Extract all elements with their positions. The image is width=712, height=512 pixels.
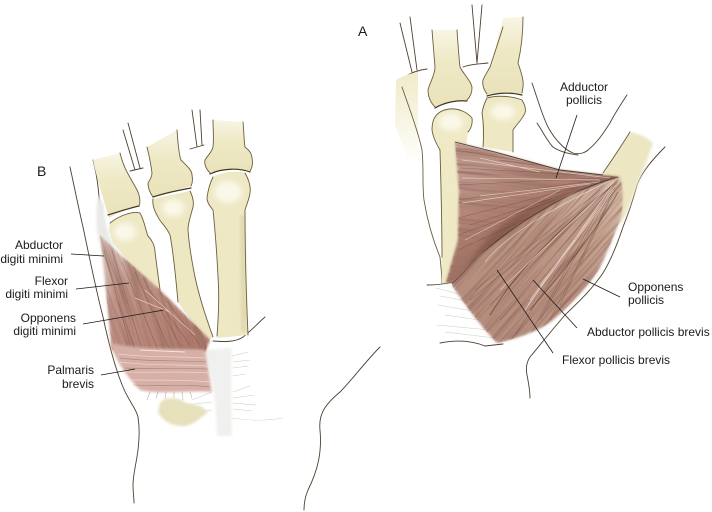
- wrist line lower right: [232, 418, 283, 420]
- bone: thumb metacarpal: [603, 132, 653, 225]
- panel label: B: B: [37, 163, 46, 179]
- tendon sheet: white central band: [96, 195, 256, 436]
- label: Flexor digiti minimi: digiti minimi: [5, 287, 68, 301]
- muscle: abductor, flexor and opponens digiti minimi: [100, 235, 212, 352]
- bone outline: ring finger: [402, 87, 442, 283]
- bone: middle finger phalanx: [205, 120, 252, 174]
- bone: ring finger phalanx: [147, 130, 192, 197]
- label: Opponens digiti minimi: [13, 310, 164, 338]
- label: Opponens digiti minimi: digiti minimi: [13, 324, 76, 338]
- label: Palmaris brevis: Palmaris: [47, 363, 94, 377]
- label: Abductor pollicis brevis: Abductor pollicis brevis: [587, 325, 710, 339]
- label: Opponens pollicis: pollicis: [628, 293, 664, 307]
- label: Flexor pollicis brevis: [497, 270, 670, 367]
- bone: little finger phalanx: [93, 153, 140, 218]
- muscle: palmaris brevis: [110, 343, 212, 400]
- label: Opponens pollicis: [583, 279, 683, 307]
- label: Opponens digiti minimi: Opponens: [21, 311, 76, 325]
- label: Flexor digiti minimi: Flexor: [35, 274, 68, 288]
- inner skin edge beside little finger: [93, 160, 100, 222]
- skin outlines of hand A: [304, 83, 665, 510]
- bone: thumb-side finger metacarpal: [482, 96, 525, 152]
- panel: view A, thumb side of the hand: [304, 4, 666, 510]
- muscle: thenar group (flexor, abductor and opponens pollicis brevis): [451, 176, 624, 344]
- label: Opponens pollicis: Opponens: [628, 280, 683, 294]
- wrist edge at right of hand B: [213, 317, 265, 342]
- label: Abductor digiti minimi: digiti minimi: [0, 252, 63, 266]
- tendon sheet: white palmar fascia: [427, 279, 503, 346]
- tendon ticks between fingers: [123, 110, 204, 171]
- bone: index finger phalanx: [428, 30, 472, 108]
- bone: little finger metacarpal: [109, 212, 161, 292]
- bone: middle finger metacarpal: [207, 172, 250, 338]
- label: Flexor pollicis brevis: Flexor pollicis brevis: [562, 353, 670, 367]
- label: Abductor digiti minimi: Abductor: [15, 238, 63, 252]
- panel label: A: A: [358, 23, 368, 39]
- label: Adductor pollicis: Adductor: [560, 80, 608, 94]
- bone: index finger metacarpal: [432, 109, 472, 284]
- skin outline of hand B: [70, 167, 139, 503]
- bone: ring finger metacarpal: [153, 191, 213, 340]
- panel: view B, little finger side of the hand: [70, 110, 283, 504]
- label: Palmaris brevis: [47, 363, 135, 391]
- label: Adductor pollicis: pollicis: [566, 93, 602, 107]
- label: Adductor pollicis: [556, 80, 608, 178]
- bone: thumb-side finger phalanx: [483, 17, 523, 96]
- label: Abductor pollicis brevis: [533, 280, 710, 339]
- tendon ticks between fingers: [400, 5, 488, 78]
- muscle: adductor pollicis: [444, 141, 620, 284]
- label: Flexor digiti minimi: [5, 274, 129, 301]
- bone: pisiform: [158, 398, 208, 426]
- label: Palmaris brevis: brevis: [62, 377, 94, 391]
- label: Abductor digiti minimi: [0, 238, 104, 266]
- bone: ring finger metacarpal, left edge fading: [395, 72, 441, 257]
